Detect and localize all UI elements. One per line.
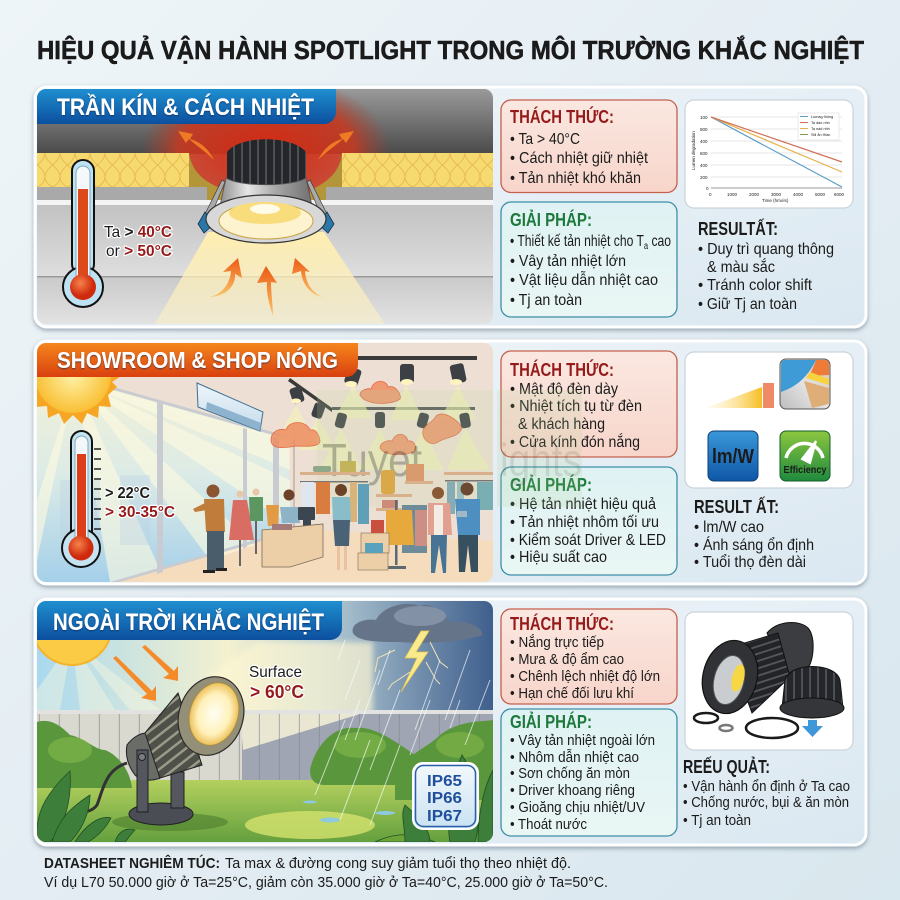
icon: gaskets	[694, 713, 798, 738]
solution box: • Nhôm dẫn nhiệt cao	[510, 749, 639, 766]
result text: RESULT ẤT:	[694, 496, 779, 517]
chart: lumen degradation: 6000	[834, 192, 845, 197]
mannequins	[229, 488, 279, 566]
label: shop temperature: > 22°C	[105, 485, 150, 502]
man at window	[193, 484, 227, 573]
heading banner: NGOÀI TRỜI KHẮC NGHIỆT	[53, 608, 324, 636]
label: shop temperature: > 30-35°C	[105, 504, 175, 521]
heading banner	[37, 89, 336, 124]
icon: air conditioner	[197, 383, 263, 431]
badge: ingress protection	[413, 763, 478, 829]
chart: lumen degradation: 0	[709, 192, 712, 197]
icon: exploded spotlight	[695, 623, 844, 719]
footer note: Ta max & đường cong suy giảm tuổi thọ theo nhiệt độ.	[225, 855, 571, 872]
icon: lm/W tile: lm/W	[712, 446, 754, 468]
chart: lumen degradation: Lumag thông	[811, 115, 833, 119]
chart: lumen degradation: 5000	[815, 192, 826, 197]
chart: lumen degradation: Ta nàd nhh	[811, 127, 830, 131]
solution box: • Kiểm soát Driver & LED	[510, 531, 666, 549]
result text: • lm/W cao	[694, 519, 764, 536]
window frames	[110, 386, 295, 582]
solution box: a	[644, 241, 648, 252]
result text: • Giữ Tj an toàn	[698, 296, 797, 313]
icon: heat arrows rising out	[178, 131, 354, 160]
solution box: • Driver khoang riêng	[510, 782, 635, 799]
watermark tint	[317, 390, 497, 507]
challenge box: • Chênh lệch nhiệt độ lớn	[510, 668, 660, 685]
puddles	[303, 800, 395, 822]
challenge box	[501, 351, 677, 457]
sun rays	[37, 658, 160, 710]
label: ambient temperature	[104, 224, 172, 260]
icon: sun	[37, 377, 120, 424]
solution box: • Vây tản nhiệt lớn	[510, 253, 626, 270]
footer note	[44, 854, 608, 891]
result text	[683, 756, 850, 829]
challenge box: THÁCH THỨC:	[510, 359, 614, 380]
challenge box: • Tản nhiệt khó khăn	[510, 170, 641, 187]
chart: lumen degradation: 200	[700, 175, 708, 180]
chart: lumen degradation: 4000	[793, 192, 804, 197]
chart: lumen degradation: Time (hmoìs)	[762, 198, 789, 203]
rack and boxes	[358, 500, 427, 570]
solution box: • Thiết kế tản nhiệt cho T	[510, 233, 687, 250]
heading banner: TRẦN KÍN & CÁCH NHIỆT	[57, 93, 314, 121]
solution box: • Vây tản nhiệt ngoài lớn	[510, 732, 655, 749]
beam in the sky	[214, 638, 376, 710]
challenge box: • Mưa & độ ẩm cao	[510, 651, 624, 668]
solution box	[501, 202, 677, 317]
solution box: • Vật liệu dẫn nhiệt cao	[510, 270, 658, 289]
solution box: • Gioăng chịu nhiệt/UV	[510, 799, 645, 816]
icon: downlight	[198, 139, 334, 243]
solution box: • Sơn chống ăn mòn	[510, 765, 630, 782]
chart: lumen degradation: 1000	[727, 192, 738, 197]
sun rays	[37, 380, 290, 582]
panel: hot showroom and shop	[35, 337, 866, 584]
challenge box: THÁCH THỨC:	[510, 613, 614, 634]
icon: colour tile	[780, 359, 830, 409]
heading banner	[37, 343, 358, 377]
icon: efficiency tile: Efficiency	[784, 465, 827, 476]
foreground leaves	[37, 755, 493, 842]
heading banner	[37, 601, 342, 640]
chart: lumen degradation: 400	[700, 163, 708, 168]
scene: shop interior	[35, 337, 497, 582]
result text	[698, 218, 834, 313]
chart: lumen degradation: 2000	[749, 192, 760, 197]
challenge box: • Nhiệt tích tụ từ đèn	[510, 398, 642, 415]
icon: drain arrow	[802, 720, 823, 737]
grass	[37, 780, 493, 842]
chart: lumen degradation: 600	[700, 151, 708, 156]
solution box: • Hiệu suất cao	[510, 549, 607, 566]
icon: lightning	[375, 631, 448, 692]
result text: • Vận hành ổn định ở Ta cao	[683, 778, 850, 795]
chart: lumen degradation: Stil ắn Hiần	[811, 132, 830, 137]
result text: • Tj an toàn	[683, 812, 751, 829]
woman in teal	[332, 484, 351, 570]
icon: storm cloud	[353, 604, 482, 643]
label: surface temperature: Surface	[249, 664, 302, 681]
badge: ingress protection: IP67	[427, 808, 462, 825]
icon card: lamp parts	[685, 612, 853, 750]
challenge box	[501, 100, 677, 192]
solution box: • Tản nhiệt nhôm tối ưu	[510, 514, 659, 531]
result text: & màu sắc	[707, 257, 775, 276]
badge: ingress protection: IP65	[427, 773, 462, 790]
couple with phones	[428, 482, 480, 573]
label: ambient temperature: Ta > 40°C	[104, 224, 172, 241]
heat clouds	[271, 381, 462, 455]
chart: lumen degradation: 3000	[771, 192, 782, 197]
solution box: • Tj an toàn	[510, 292, 582, 309]
result text: • Duy trì quang thông	[698, 241, 834, 258]
bushes	[37, 720, 493, 800]
solution box	[501, 709, 677, 836]
result text: RESULTẤT:	[698, 218, 778, 239]
result text: • Tránh color shift	[698, 277, 813, 294]
chart: lumen degradation: Lumen degradation	[691, 131, 696, 170]
challenge box: • Mật độ đèn dày	[510, 381, 618, 398]
store shelves and clothes	[300, 461, 493, 524]
icon card: lighting benefits	[685, 352, 853, 488]
solution box: • Hệ tản nhiệt hiệu quả	[510, 496, 656, 513]
chart: lumen degradation	[685, 100, 853, 208]
challenge box: & khách hàng	[518, 416, 605, 433]
icon: sun	[37, 601, 110, 666]
icon: thermometer	[63, 160, 103, 307]
watermark continuation: ights	[500, 434, 582, 486]
result text: • Chống nước, bụi & ăn mòn	[683, 794, 849, 811]
challenge box: • Ta > 40°C	[510, 131, 580, 148]
solution box: cao	[648, 233, 671, 250]
challenge box: • Nắng trực tiếp	[510, 634, 604, 651]
solution box: GIẢI PHÁP:	[510, 711, 592, 732]
challenge box	[501, 609, 677, 704]
challenge box: • Cách nhiệt giữ nhiệt	[510, 150, 648, 167]
chart: lumen degradation: 400	[700, 139, 708, 144]
icon: garden spotlight	[75, 668, 254, 825]
result text: • Tuổi thọ đèn dài	[694, 553, 806, 571]
solution box: GIẢI PHÁP:	[510, 209, 592, 230]
challenge box: • Hạn chế đối lưu khí	[510, 685, 635, 702]
chart: lumen degradation: 100	[700, 115, 708, 120]
footer note: DATASHEET NGHIÊM TÚC:	[44, 854, 220, 872]
icon: light beam	[705, 383, 774, 408]
panel: sealed insulated ceiling	[35, 75, 866, 327]
scene: ceiling cross-section	[37, 75, 493, 324]
label: surface temperature	[249, 664, 304, 702]
chart: lumen degradation: Ta dào nhh	[811, 121, 830, 125]
rain	[315, 640, 490, 825]
result text: • Ánh sáng ổn định	[694, 535, 814, 554]
watermark continuation	[497, 390, 582, 507]
challenge box: THÁCH THỨC:	[510, 106, 614, 127]
icon: efficiency tile	[780, 431, 830, 481]
panel: harsh outdoor	[32, 585, 866, 845]
label: ambient temperature: or > 50°C	[106, 243, 172, 260]
label: surface temperature: > 60°C	[250, 682, 304, 702]
counter and cashier	[262, 490, 323, 567]
result text	[694, 496, 814, 571]
label: shop temperature	[105, 485, 175, 521]
track lighting	[277, 356, 490, 470]
icon: heat arrows from below	[210, 258, 322, 316]
chart: lumen degradation: 0	[706, 186, 709, 191]
challenge box: • Cửa kính đón nắng	[510, 432, 640, 451]
footer note: Ví dụ L70 50.000 giờ ở Ta=25°C, giảm còn 35.000 giờ ở Ta=40°C, 25.000 giờ ở Ta=50°C.	[44, 874, 608, 891]
solution box: • Thoát nước	[510, 816, 587, 833]
scene: garden in sun and storm	[32, 585, 493, 842]
solution box	[501, 467, 677, 575]
watermark text: Tuyet	[322, 434, 422, 486]
badge: ingress protection: IP66	[427, 790, 462, 807]
icon: thermometer	[62, 431, 101, 567]
fence	[37, 710, 493, 780]
chart: lumen degradation: 900	[700, 127, 708, 132]
icon: sun heat arrows	[113, 645, 178, 701]
icon: lm/W tile	[708, 431, 758, 481]
result text: REẾU QUẢT:	[683, 756, 770, 777]
heading banner: SHOWROOM & SHOP NÓNG	[57, 346, 338, 373]
solution box: GIẢI PHÁP:	[510, 474, 592, 495]
